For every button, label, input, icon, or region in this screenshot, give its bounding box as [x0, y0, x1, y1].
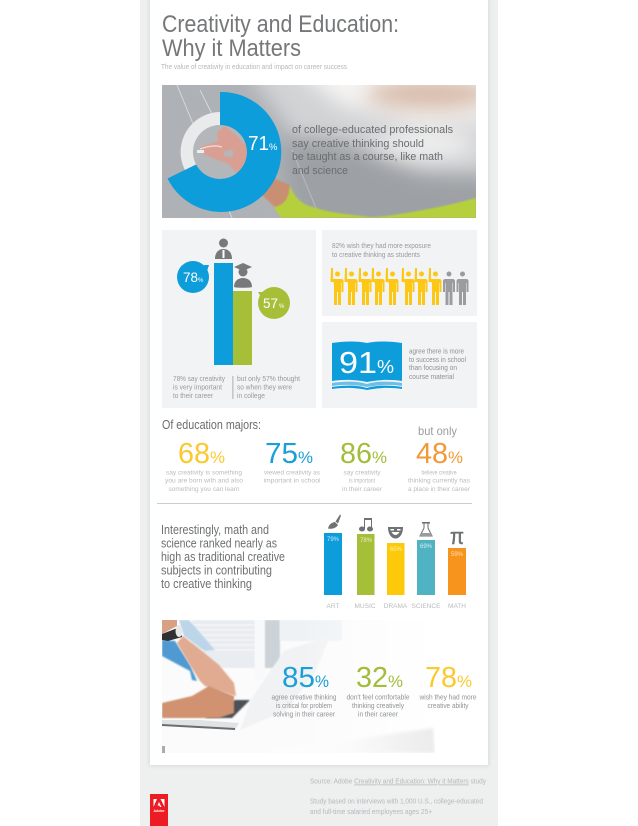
icon: music notes [359, 518, 373, 532]
text block: math and science: to creative thinking [161, 577, 252, 591]
bar: art [324, 533, 342, 610]
stat: 48% [408, 438, 471, 493]
bar: career 78 [214, 263, 233, 365]
icon: open book [332, 342, 402, 390]
value: 91%: 91 [339, 345, 377, 380]
stat: 78%: 78 [425, 662, 457, 694]
stat: 85%: is critical for problem [276, 701, 332, 710]
stat: 68%: say creativity is something [166, 470, 242, 476]
exposure text: to creative thinking as students [332, 250, 420, 259]
white card shadow [149, 0, 489, 766]
panel: 91% book [322, 322, 477, 408]
stat: 75%: 75 [265, 438, 298, 470]
footer source: Source: Adobe Creativity and Education: Why it Matters study [310, 776, 486, 786]
stat: 86%: is important [349, 478, 375, 484]
hero text: of college-educated professionals [292, 124, 453, 136]
bubble: 57%: 57 [263, 295, 278, 311]
hand [200, 126, 247, 174]
ring value: 71 [248, 133, 269, 155]
caption: career: is very important [173, 382, 223, 392]
ring inner photo [193, 125, 247, 179]
text block: math and science [161, 523, 285, 591]
stat: 85%: solving in their career [273, 710, 335, 718]
white card [150, 0, 488, 765]
title [162, 11, 399, 62]
stat: 78%: wish they had more [419, 692, 476, 702]
bar chart: subjects [324, 514, 466, 610]
table shade [378, 728, 435, 753]
stat: 32%: thinking creatively [352, 701, 404, 710]
caption: college: in college [237, 391, 265, 400]
bar: science: SCIENCE [412, 603, 441, 610]
bar: art: ART [327, 603, 339, 610]
caption: career [173, 374, 225, 400]
bubble: 57% [258, 287, 290, 319]
bar: math [448, 548, 466, 610]
title: Creativity and Education: [162, 11, 399, 38]
bar: art: 79% [327, 537, 340, 543]
bubble: 78% [177, 261, 209, 293]
bar: math: 59% [451, 552, 464, 558]
hero text [292, 124, 453, 177]
bubble: 78%: 78 [183, 269, 198, 285]
title: Why it Matters [162, 35, 301, 62]
bar: drama: 65% [390, 547, 403, 553]
stat: 85%: agree creative thinking [272, 692, 336, 702]
value: 91% [339, 345, 394, 380]
stat: 85%: % [315, 672, 329, 691]
footer note: Study based on interviews with 1,000 U.S., college-educated [310, 796, 483, 806]
wrist [262, 178, 290, 208]
stat: 48%: 48 [416, 438, 448, 470]
stat: 75%: viewed creativity as [264, 470, 321, 476]
text block: math and science: subjects in contributing [161, 564, 272, 578]
stat: 32% [346, 662, 410, 718]
stat: 86%: 86 [340, 438, 372, 470]
stat: 78%: creative ability [428, 701, 469, 710]
forearm [177, 636, 236, 696]
hero text: say creative thinking should [292, 138, 424, 150]
book caption: to success in school [409, 355, 466, 364]
panel: 82% exposure [322, 230, 477, 316]
stat: 75%: % [298, 448, 313, 467]
heading: of education majors: Of education majors: [162, 417, 261, 432]
photo right fade [300, 618, 438, 756]
bubble: 78%: % [198, 278, 204, 284]
light half ring [181, 112, 220, 172]
icon: graduate [234, 263, 252, 288]
caption: college [237, 374, 301, 400]
stat: 68%: something you can learn [168, 486, 240, 493]
ring value: % [269, 142, 278, 153]
bar: college 57 [233, 291, 252, 365]
subtitle: The value of creativity in education and impact on career success [161, 64, 347, 71]
hero photo background [162, 85, 476, 218]
stat: 75%: important in school [264, 478, 321, 484]
blue ring [168, 92, 281, 212]
bar: music: MUSIC [355, 603, 376, 610]
caption: career: to their career [173, 391, 213, 400]
icon: flask [420, 522, 432, 536]
laptop backdrop [162, 620, 437, 753]
panel: hero photo with 71% ring [162, 85, 476, 218]
laptop base [162, 720, 239, 730]
stat: 68%: 68 [178, 438, 210, 470]
logo: Adobe [150, 794, 168, 826]
stat: 68%: you are born with and also [165, 478, 243, 484]
caption: college: but only 57% thought [237, 374, 301, 383]
icon: professional [215, 238, 232, 259]
stat: 86% [340, 438, 387, 493]
stat: 48%: believe creative [422, 470, 457, 476]
stat: 48%: % [448, 448, 463, 467]
bar: music: 78% [360, 538, 373, 544]
stat: 75% [264, 438, 321, 484]
bar: science: 69% [420, 544, 433, 550]
stat: 86%: % [372, 448, 387, 467]
hero text: be taught as a course, like math [292, 151, 443, 163]
bar: music [355, 534, 376, 610]
laptop screen [242, 642, 326, 728]
green sleeve [274, 185, 476, 218]
book caption: course material [409, 372, 454, 381]
stat: 86%: in their career [342, 486, 383, 493]
text block: math and science: high as traditional creative [161, 550, 285, 564]
note: but only: but only [418, 424, 457, 438]
stat: 68% [165, 438, 243, 493]
book caption: than focusing on [409, 363, 457, 372]
footer note: and full-time salaried employees ages 25+ [310, 807, 433, 816]
text block: math and science: science ranked nearly as [161, 536, 277, 550]
stat: 86%: say creativity [344, 470, 381, 476]
stat: 32%: in their career [358, 710, 398, 718]
stat: 32%: don't feel comfortable [346, 692, 410, 702]
stat: 32%: % [388, 672, 403, 691]
pale shirt sleeve [179, 620, 215, 651]
exposure text [332, 241, 431, 259]
stat: 85%: 85 [282, 662, 315, 694]
bar: drama [384, 543, 408, 610]
stat: 78%: % [457, 672, 472, 691]
stat: 85% [272, 662, 336, 718]
caption: college: so when they were [237, 382, 292, 392]
stat: 48%: thinking currently has [408, 478, 471, 484]
hero text: and science [292, 165, 348, 177]
page backdrop strip [140, 0, 498, 826]
bar: science [412, 540, 441, 610]
hand [162, 686, 234, 718]
caption: career: 78% say creativity [173, 374, 225, 383]
icon: mask [388, 527, 403, 538]
stat: 32%: 32 [356, 662, 388, 694]
value: 91%: % [377, 357, 394, 377]
footer note [310, 796, 483, 816]
text block: math and science: Interestingly, math and [161, 523, 269, 537]
icon: paintbrush [328, 514, 341, 529]
bubble: 57%: % [279, 304, 285, 310]
watch [162, 628, 182, 641]
bar: drama: DRAMA [384, 603, 408, 610]
book caption [409, 346, 466, 381]
stat: 68%: % [210, 448, 225, 467]
shirt [162, 640, 197, 681]
icon: pi: π [450, 524, 464, 549]
stat: 78% [419, 662, 476, 710]
people pictogram [330, 268, 468, 305]
panel: career vs college [162, 230, 316, 408]
skin above watch [162, 620, 177, 634]
book caption: agree there is more [409, 346, 464, 356]
keyboard [205, 700, 250, 718]
logo: Adobe: Adobe [154, 809, 164, 813]
stat: 48%: a place in their career [408, 486, 471, 493]
exposure text: 82% wish they had more exposure [332, 241, 431, 250]
panel: laptop photo [162, 618, 438, 756]
bar: math: MATH [448, 603, 466, 610]
